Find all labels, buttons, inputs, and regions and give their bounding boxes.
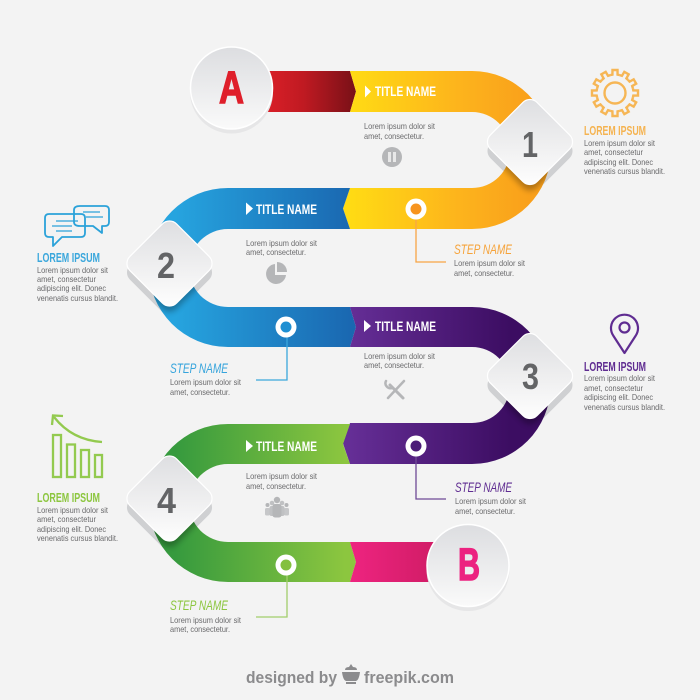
step marker 1 <box>406 198 426 220</box>
side block 2 text: amet, consectetur <box>37 274 96 284</box>
icon: falling bar chart with arrow <box>52 416 102 477</box>
text: title 4 description <box>246 471 318 491</box>
side block 3 text: Lorem ipsum dolor sit <box>584 373 656 383</box>
text: title 2 description: amet, consectetur. <box>246 247 306 257</box>
step 4 text: STEP NAME <box>170 597 228 613</box>
title label 3 <box>364 318 436 334</box>
step 2 text: Lorem ipsum dolor sit <box>170 377 242 387</box>
diamond 2: 2 <box>157 245 175 286</box>
text: title 3 description <box>364 351 436 370</box>
step connector 4 <box>256 574 287 617</box>
side block 4 text: Lorem ipsum dolor sit <box>37 505 109 515</box>
text: title 4 description: amet, consectetur. <box>246 481 306 491</box>
road: start segment red <box>260 71 356 112</box>
text: title 4 description: Lorem ipsum dolor sit <box>246 471 318 481</box>
diamond 4: 4 <box>157 480 176 521</box>
side block 1 text: amet, consectetur <box>584 147 643 157</box>
side block 1 text: LOREM IPSUM <box>584 124 646 138</box>
diamond side depths <box>123 104 577 554</box>
side block 2 text: LOREM IPSUM <box>37 251 100 265</box>
side block 1 text: Lorem ipsum dolor sit <box>584 138 656 148</box>
title label 1 <box>365 83 436 99</box>
circle marker A: A <box>219 62 244 113</box>
side block 4 text: LOREM IPSUM <box>37 491 100 505</box>
text: title 3 description: Lorem ipsum dolor sit <box>364 351 436 361</box>
title label 3: TITLE NAME <box>375 318 436 334</box>
road: green segment <box>149 424 356 582</box>
step connector 1 <box>416 218 446 262</box>
side block 4 text: venenatis cursus blandit. <box>37 533 118 543</box>
step 2 text <box>170 360 242 397</box>
step 3 text: amet, consectetur. <box>455 506 515 516</box>
text: title 1 description: amet, consectetur. <box>364 131 424 141</box>
diamond shadows on road <box>123 101 577 551</box>
side block 3 text: venenatis cursus blandit. <box>584 402 665 412</box>
icon: pie chart <box>266 262 287 284</box>
side block 3 text: LOREM IPSUM <box>584 360 646 374</box>
diamond 4 <box>123 452 216 545</box>
side block 2 text <box>37 251 118 303</box>
side block 3 text: amet, consectetur <box>584 383 643 393</box>
step 4 text <box>170 597 242 634</box>
step 2 text: STEP NAME <box>170 360 228 376</box>
icon: gear <box>592 70 638 116</box>
text: title 1 description: Lorem ipsum dolor sit <box>364 121 436 131</box>
step 4 text: amet, consectetur. <box>170 624 230 634</box>
side block 1 text: adipiscing elit. Donec <box>584 157 653 167</box>
side block 1 text <box>584 124 665 176</box>
step connector 3 <box>416 456 446 499</box>
icon: chat bubbles <box>45 206 109 246</box>
road: purple segment <box>343 307 550 464</box>
side block 4 text: amet, consectetur <box>37 514 96 524</box>
title label 2 <box>246 201 317 217</box>
step 1 text <box>454 241 526 278</box>
side block 4 text: adipiscing elit. Donec <box>37 524 106 534</box>
icon: map pin <box>611 315 638 353</box>
step connector 2 <box>256 336 287 380</box>
step 3 text: STEP NAME <box>455 479 512 495</box>
step 3 text <box>455 479 527 516</box>
footer credit: freepik.com <box>364 668 454 687</box>
title label 1: TITLE NAME <box>375 83 436 99</box>
title label 2: TITLE NAME <box>256 201 317 217</box>
step marker 4 <box>276 554 296 576</box>
side block 1 text: venenatis cursus blandit. <box>584 166 665 176</box>
diamond 3 <box>483 329 577 423</box>
icon: pause <box>382 147 402 167</box>
diamond 3: 3 <box>522 356 539 397</box>
footer credit <box>246 664 454 687</box>
text: title 2 description: Lorem ipsum dolor sit <box>246 238 318 248</box>
road: end segment pink <box>350 542 440 582</box>
text: title 3 description: amet, consectetur. <box>364 360 424 370</box>
side block 3 text <box>584 360 665 412</box>
step 2 text: amet, consectetur. <box>170 387 230 397</box>
diamond 1 <box>483 95 577 189</box>
title label 4 <box>246 438 317 454</box>
icon: people <box>265 497 289 518</box>
step marker 2 <box>276 316 296 338</box>
icon: tools <box>385 381 404 398</box>
text: title 1 description <box>364 121 436 141</box>
side block 3 text: adipiscing elit. Donec <box>584 392 653 402</box>
diamond 1: 1 <box>522 124 538 165</box>
side block 4 text <box>37 491 118 543</box>
title label 4: TITLE NAME <box>256 438 317 454</box>
step marker 3 <box>406 436 426 456</box>
road: yellow segment <box>343 71 551 229</box>
step 3 text: Lorem ipsum dolor sit <box>455 496 527 506</box>
text: title 2 description <box>246 238 318 257</box>
circle marker B: B <box>458 539 480 590</box>
road: blue segment <box>148 188 356 347</box>
step 1 text: amet, consectetur. <box>454 268 514 278</box>
step 4 text: Lorem ipsum dolor sit <box>170 615 242 625</box>
circle marker A <box>190 47 273 134</box>
side block 2 text: Lorem ipsum dolor sit <box>37 265 109 275</box>
side block 2 text: adipiscing elit. Donec <box>37 283 106 293</box>
footer credit: designed by <box>246 668 337 687</box>
side block 2 text: venenatis cursus blandit. <box>37 293 118 303</box>
step 1 text: Lorem ipsum dolor sit <box>454 258 526 268</box>
step 1 text: STEP NAME <box>454 241 512 257</box>
circle marker B <box>426 524 510 611</box>
diamond 2 <box>123 217 216 310</box>
